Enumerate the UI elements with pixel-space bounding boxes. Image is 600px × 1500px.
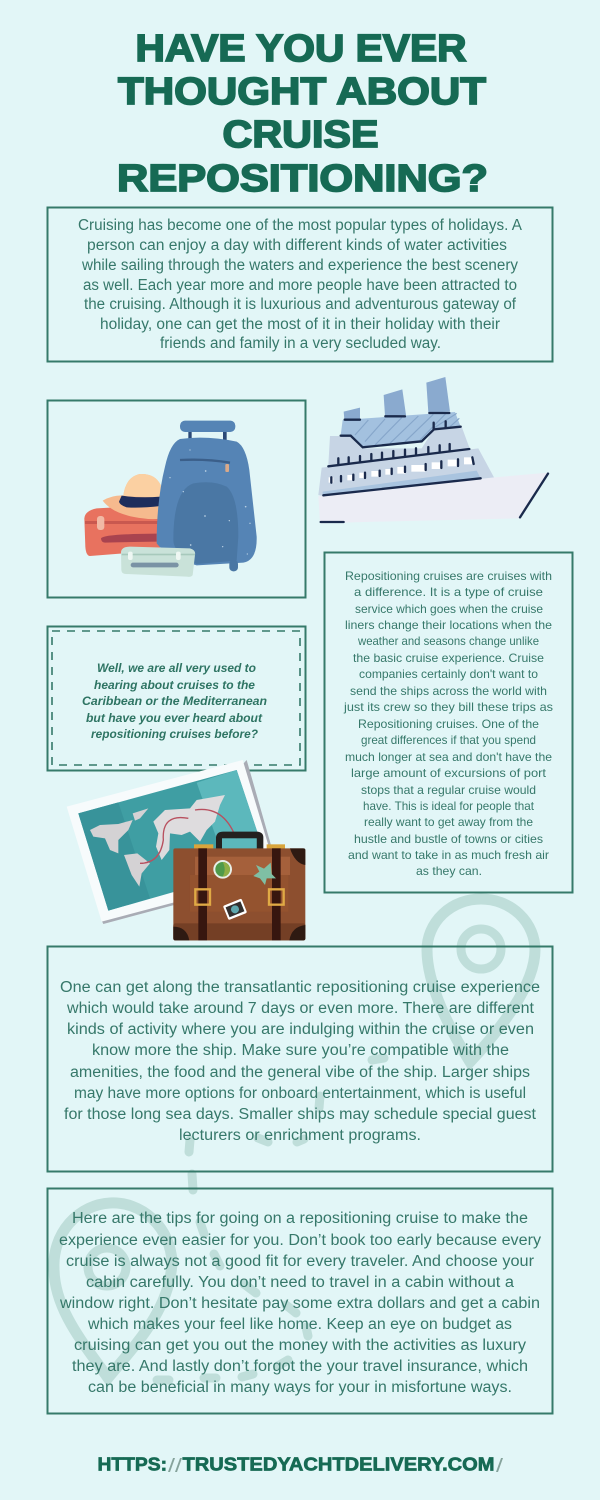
panel: luggage illustration	[48, 400, 306, 598]
panel: transatlantic experience: lecturers or enrichment programs.	[179, 1127, 421, 1144]
callout: have you heard: Caribbean or the Mediterranean	[82, 694, 267, 708]
website link: //	[168, 1456, 183, 1477]
panel: tips: Here are the tips for going on a repositioning cruise to make the	[72, 1210, 528, 1227]
panel: transatlantic experience: One can get along the transatlantic repositioning cruise experience	[60, 979, 540, 996]
website link: TRUSTEDYACHTDELIVERY.COM	[182, 1454, 494, 1474]
panel: what repositioning cruises are: send the ships across the world with	[350, 684, 547, 698]
callout: have you heard	[48, 626, 306, 770]
panel: transatlantic experience: kinds of activity where you are indulging within the cruise or even	[67, 1021, 534, 1038]
panel: what repositioning cruises are: service which goes when the cruise	[355, 602, 543, 616]
panel: transatlantic experience: know more the ship. Make sure you’re compatible with the	[92, 1042, 509, 1059]
panel: what repositioning cruises are: as they can.	[416, 864, 482, 878]
panel: introduction: friends and family in a very secluded way.	[160, 335, 441, 352]
panel: tips: experience even easier for you. Don’t book too early because every	[59, 1232, 541, 1249]
panel: what repositioning cruises are: great differences if that you spend	[361, 733, 536, 747]
callout: have you heard: but have you ever heard about	[86, 711, 263, 725]
website link	[98, 1454, 504, 1477]
callout: have you heard: hearing about cruises to the	[94, 678, 255, 692]
panel: introduction: the cruising. Although it is luxurious and adventurous gateway of	[84, 296, 517, 313]
panel: what repositioning cruises are: Repositioning cruises. One of the	[358, 717, 539, 731]
watermark: location pins with dotted route	[54, 899, 535, 1380]
panel: what repositioning cruises are: liners change their locations when the	[345, 618, 552, 632]
panel: what repositioning cruises are: large amount of excursions of port	[351, 766, 547, 780]
panel: tips: cruising can get you out the money with the activities as luxury	[74, 1337, 526, 1354]
panel: transatlantic experience: for those long sea days. Smaller ships may schedule special guest	[64, 1106, 537, 1123]
panel: what repositioning cruises are: and want to take in as much fresh air	[348, 848, 549, 862]
panel: introduction: as well. Each year more and more people have been attracted to	[83, 277, 517, 294]
panel: what repositioning cruises are: much longer at sea and don't have the	[345, 750, 552, 764]
panel: what repositioning cruises are: a difference. It is a type of cruise	[354, 585, 543, 599]
panel: what repositioning cruises are: companies certainly don't want to	[359, 667, 538, 681]
panel: what repositioning cruises are: stops that a regular cruise would	[361, 783, 536, 797]
panel: introduction: while sailing through the waters and experience the best scenery	[81, 257, 518, 274]
panel: what repositioning cruises are: just its crew so they bill these trips as	[343, 700, 553, 714]
panel: transatlantic experience: which would take around 7 days or even more. There are different	[66, 1000, 535, 1017]
icon: world map and suitcase	[67, 760, 305, 940]
panel: what repositioning cruises are: hustle and bustle of towns or cities	[354, 832, 543, 846]
panel: what repositioning cruises are: weather and seasons change unlike	[357, 634, 539, 648]
title: THOUGHT ABOUT	[118, 71, 486, 113]
panel: tips: cruise is always not a good fit for every traveler. And choose your	[66, 1253, 534, 1270]
panel: what repositioning cruises are: the basic cruise experience. Cruise	[353, 651, 544, 665]
panel: introduction: holiday, one can get the most of it in their holiday with their	[100, 316, 500, 333]
panel: tips: cabin carefully. You don’t need to travel in a cabin without a	[86, 1274, 514, 1291]
panel: what repositioning cruises are: have. This is ideal for people that	[363, 799, 535, 813]
title: REPOSITIONING?	[117, 158, 488, 200]
panel: transatlantic experience: amenities, the food and the general vibe of the ship. Larger ships	[70, 1064, 530, 1081]
panel: what repositioning cruises are	[324, 552, 572, 892]
website link: HTTPS:	[98, 1454, 167, 1474]
panel: tips: can be beneficial in many ways for your in misfortune ways.	[88, 1379, 512, 1396]
title: HAVE YOU EVER	[136, 28, 466, 70]
panel: tips: they are. And lastly don’t forgot the your travel insurance, which	[72, 1358, 528, 1375]
panel: transatlantic experience: may have more options for onboard entertainment, which is useful	[74, 1085, 526, 1102]
panel: tips	[48, 1188, 552, 1414]
panel: what repositioning cruises are: Repositioning cruises are cruises with	[345, 569, 552, 583]
panel: introduction: person can enjoy a day with different kinds of water activities	[87, 237, 507, 254]
website link: /	[496, 1456, 504, 1477]
icon: cruise ship	[318, 377, 548, 523]
panel: introduction: Cruising has become one of the most popular types of holidays. A	[78, 217, 523, 234]
panel: tips: which makes your feel like home. Keep an eye on budget as	[87, 1316, 512, 1333]
panel: what repositioning cruises are: really want to get away from the	[364, 815, 533, 829]
icon: luggage with hat	[84, 421, 257, 577]
panel: introduction	[48, 208, 552, 362]
panel: transatlantic experience	[48, 946, 552, 1172]
title: CRUISE	[222, 114, 378, 156]
callout: have you heard: repositioning cruises before?	[91, 727, 259, 741]
callout: have you heard: Well, we are all very used to	[97, 661, 256, 675]
panel: tips: window right. Don’t hesitate pay some extra dollars and get a cabin	[59, 1295, 540, 1312]
title	[117, 28, 488, 200]
